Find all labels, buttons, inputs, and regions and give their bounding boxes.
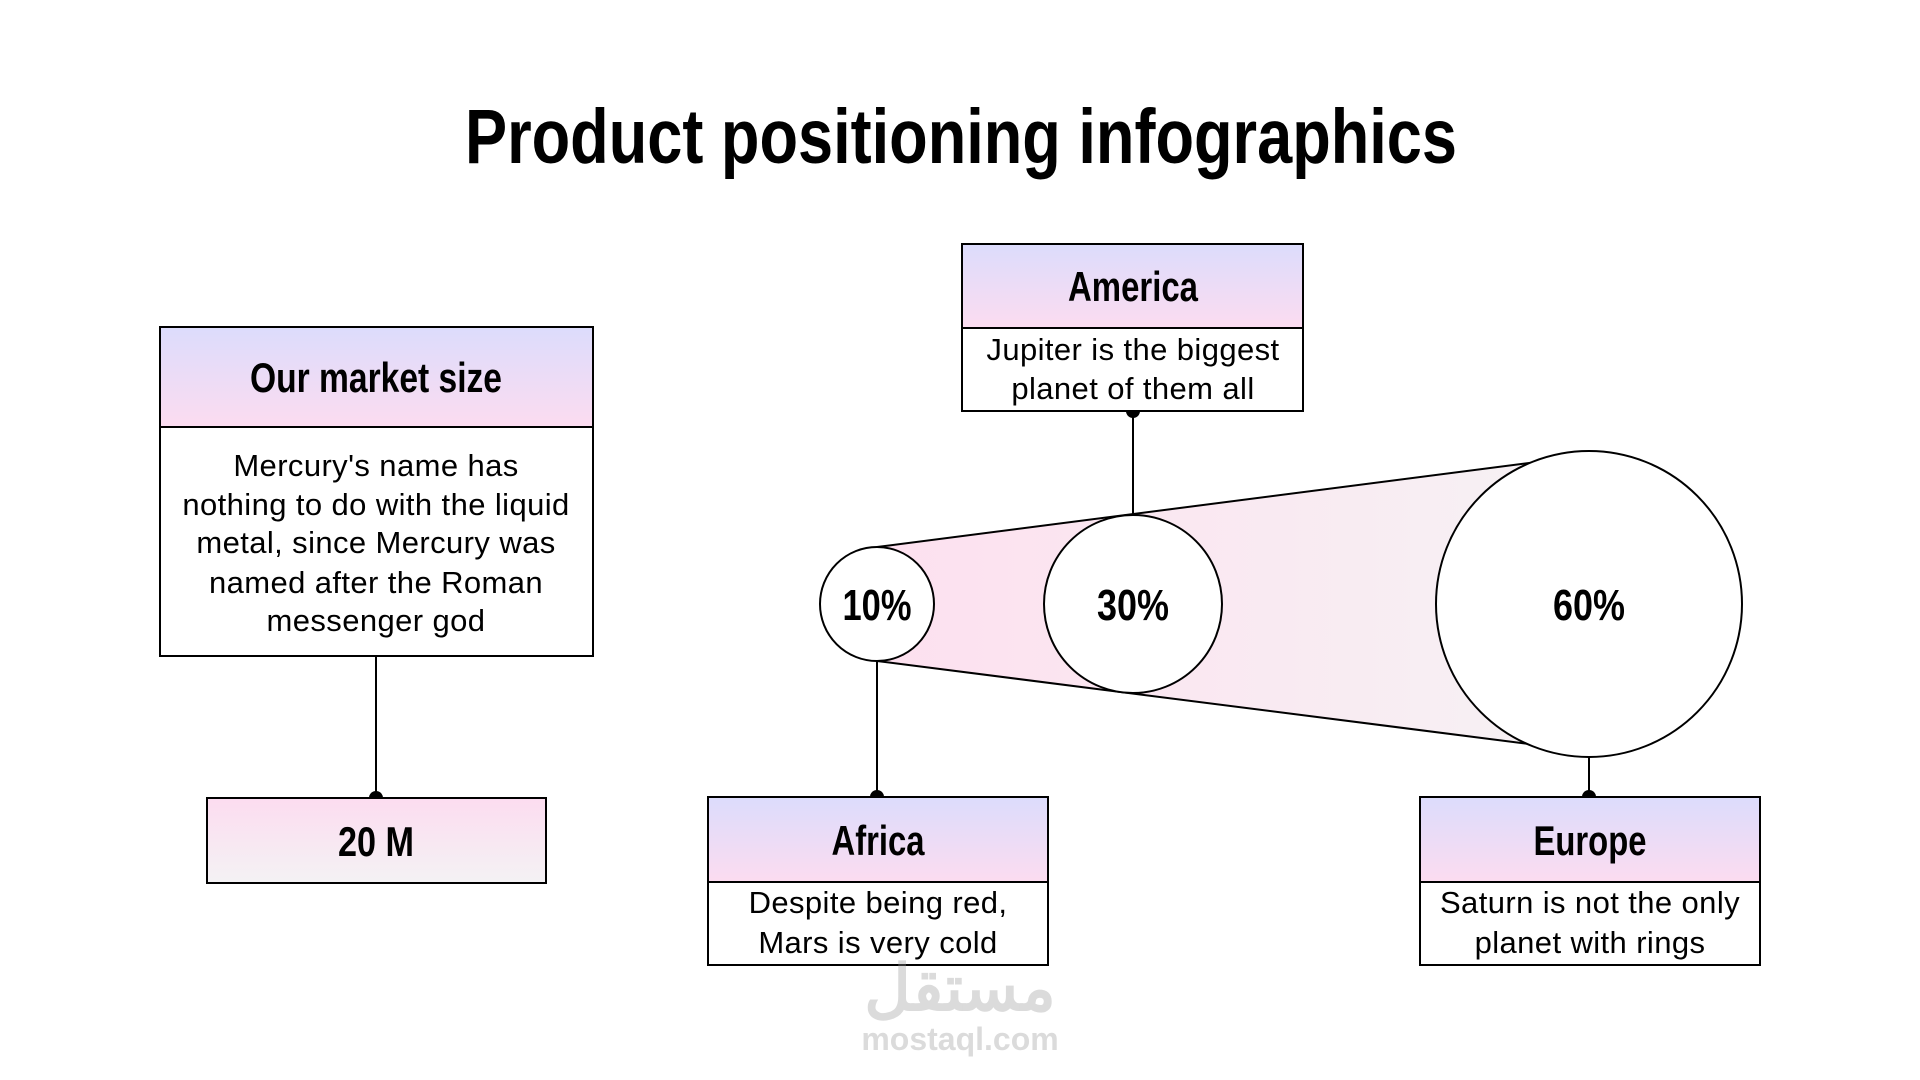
panel: America: Jupiter is the biggest (986, 332, 1280, 367)
connector: Africa (870, 661, 884, 804)
watermark: mostaql.com (861, 1021, 1059, 1057)
circle 30% (1044, 515, 1222, 693)
panel: market size: messenger god (267, 603, 485, 638)
circle 60% (1436, 451, 1742, 757)
panel: America: America (1068, 263, 1199, 310)
panel: Africa: Africa (832, 817, 925, 864)
title: Product positioning infographics (465, 94, 1457, 180)
circle 30%: 30% (1097, 581, 1169, 630)
panel: market size: Mercury's name has (233, 448, 519, 483)
chart: cone (820, 451, 1742, 757)
panel: America (962, 244, 1303, 411)
panel: market size: Our market size (250, 354, 502, 401)
circle 10% (820, 547, 934, 661)
panel: 20 M (207, 798, 546, 883)
panel: Europe: Europe (1534, 817, 1646, 864)
panel: market size: metal, since Mercury was (196, 525, 556, 560)
panel: market size: named after the Roman (209, 565, 543, 600)
panel: Africa: Mars is very cold (758, 925, 998, 960)
connector: America (1126, 404, 1140, 515)
panel: market size (160, 327, 593, 656)
watermark (861, 952, 1059, 1057)
panel: Europe: planet with rings (1475, 925, 1705, 960)
panel: Europe: Saturn is not the only (1440, 885, 1740, 920)
panel: 20 M: 20 M (338, 818, 414, 865)
circle 60%: 60% (1553, 581, 1625, 630)
circle 10%: 10% (842, 581, 912, 630)
panel: Africa: Despite being red, (749, 885, 1007, 920)
connector: market to value (369, 656, 383, 805)
connector: Europe (1582, 757, 1596, 804)
watermark: مستقل (864, 952, 1056, 1024)
panel: Europe (1420, 797, 1760, 965)
panel: market size: nothing to do with the liquid (182, 487, 570, 522)
panel: Africa (708, 797, 1048, 965)
panel: America: planet of them all (1011, 371, 1255, 406)
